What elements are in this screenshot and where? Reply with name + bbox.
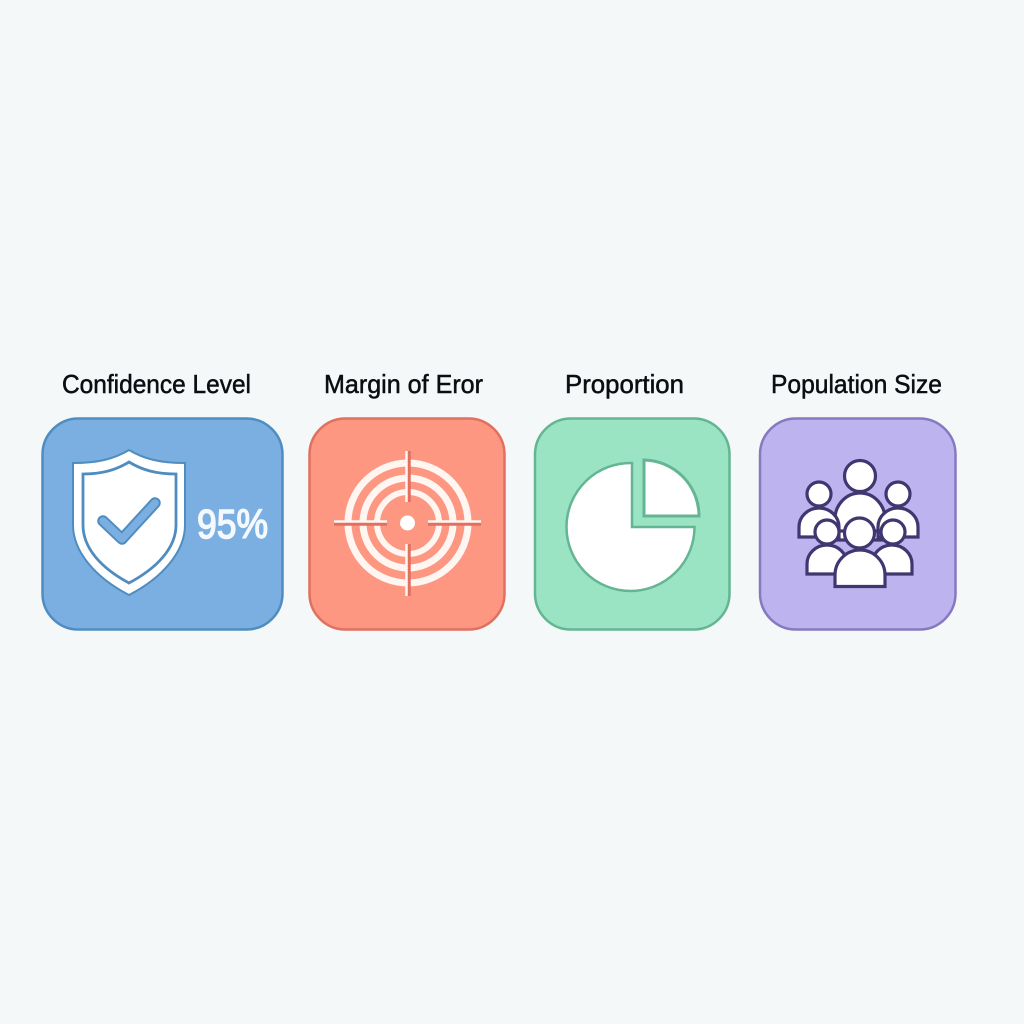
- panel: proportion: [535, 369, 730, 630]
- value: 95 percent: 95%: [197, 501, 268, 547]
- card: coral background: [310, 418, 504, 630]
- heading: margin of error: Margin of Eror: [324, 369, 483, 399]
- panel: confidence level: [42, 369, 282, 630]
- icon: shield with check mark: [73, 450, 185, 595]
- card: green background: [535, 418, 730, 630]
- icon: target with crosshair: [334, 451, 481, 596]
- icon: pie chart: [566, 460, 699, 591]
- card: blue background: [42, 418, 282, 630]
- heading: confidence level: Confidence Level: [62, 369, 251, 399]
- panel: population size: [760, 369, 956, 630]
- card: purple background: [760, 418, 956, 630]
- heading: proportion: Proportion: [565, 369, 684, 399]
- panel: margin of error: [310, 369, 504, 630]
- icon: group of people: [799, 460, 918, 586]
- heading: population size: Population Size: [771, 369, 942, 399]
